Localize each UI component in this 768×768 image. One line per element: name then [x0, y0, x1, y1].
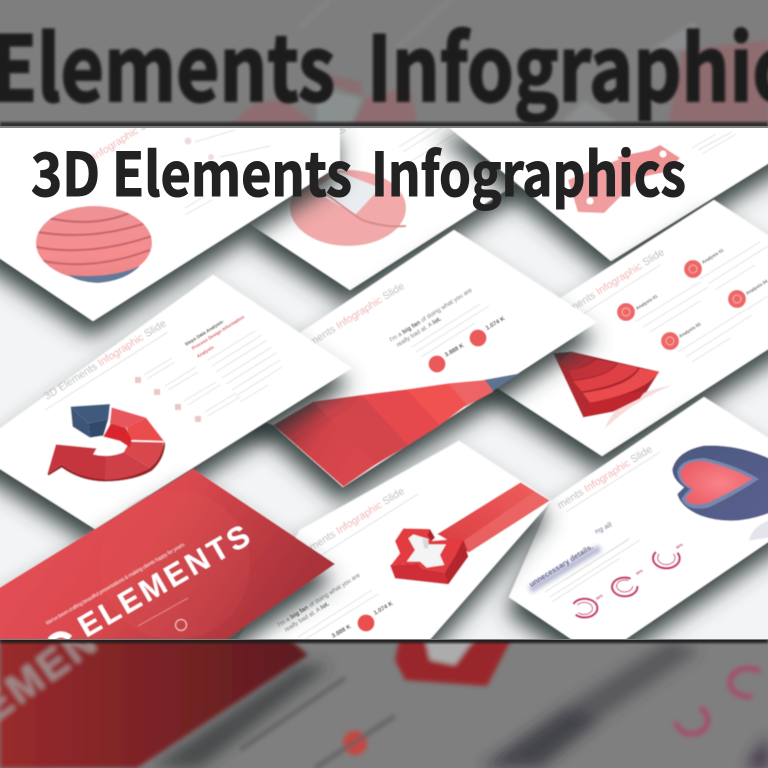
stat: 3.888 K [428, 343, 466, 372]
slide title: ments Infographic Slide [307, 485, 407, 554]
stats [331, 601, 395, 640]
arrow shapes [568, 145, 680, 213]
main collage panel [0, 110, 768, 645]
feature list [135, 358, 240, 422]
main title [31, 127, 686, 214]
donut labels: 86% [675, 542, 684, 550]
slide: red title cover [0, 469, 335, 645]
blurred stat circle [343, 731, 367, 755]
stats: 1.074 K [373, 601, 395, 617]
slide: pie chart: ments Info [317, 112, 365, 149]
intro text: I'm a big fan of doing what you are [276, 572, 362, 629]
bottom blurred band [0, 615, 768, 768]
slide: pie chart [250, 110, 530, 290]
slide title: ments Infographic Slide [555, 443, 655, 512]
analysis items [617, 242, 768, 362]
blurred enlarged title [0, 25, 768, 124]
donut labels: 86% [595, 593, 604, 601]
purple text glow [530, 548, 600, 590]
slide: 3D ring [0, 275, 352, 529]
blurred shadows [150, 640, 768, 768]
analysis items: Analysis 01 [635, 293, 659, 311]
heart chart [672, 445, 768, 541]
slide title: ments Infographic Slide [567, 246, 667, 315]
stat: 1.074 K: 1.074 K [485, 316, 507, 332]
stats: 3.888 K [331, 624, 353, 640]
donut labels [595, 542, 684, 601]
cover subtitle: We've been crafting beautiful presentations & making clients happy for years. [45, 542, 187, 627]
analysis items: Analysis 03 [678, 321, 702, 339]
heading text: ng all [594, 521, 613, 536]
ring chart [47, 404, 165, 482]
stat: 3.888 K: 3.888 K [444, 343, 466, 359]
stair chart [273, 373, 520, 487]
slide: arrows [440, 120, 768, 261]
blurred cross shape [395, 638, 512, 686]
stat: 1.074 K [470, 316, 507, 346]
donut charts [573, 552, 680, 617]
heading text [527, 521, 613, 589]
sphere graphic [36, 206, 152, 284]
bar behind cross [437, 482, 550, 552]
slide: analysis with pyramid [459, 200, 768, 456]
intro text: I'm a big fan of doing what you are [388, 287, 474, 344]
main title: Infographics [371, 127, 686, 214]
intro text: really bad at. A lot. [395, 315, 443, 349]
pyramid chart [553, 352, 673, 428]
cross shape [390, 528, 468, 584]
clock icon [176, 620, 186, 630]
pie shape [290, 170, 406, 246]
slide: heart and donuts [509, 397, 768, 645]
partial 3D numeral [50, 634, 70, 640]
analysis items: Analysis 04 [745, 278, 768, 296]
main title: 3D [31, 127, 100, 214]
process text: Process Design Information [191, 314, 245, 351]
slide: big fan with stair chart [200, 230, 597, 487]
blurred red cover [0, 635, 308, 768]
donut labels: 86% [635, 568, 644, 576]
heading text: unnecessary details. [527, 542, 595, 589]
process text: Analysis [196, 344, 215, 359]
cover heading: ELEMENTS [72, 518, 256, 644]
decorative circle [124, 496, 148, 511]
slide title: ments Infographic Slide [307, 280, 407, 349]
blurred donuts [676, 668, 760, 734]
slide: cross shape [235, 441, 551, 645]
slide: sphere: Infographic Slide [90, 111, 163, 163]
main title: Elements [112, 127, 352, 214]
process text: Steps Data Analysis: [184, 318, 225, 347]
slide title: 3D Elements Infographic Slide [42, 317, 169, 403]
slide: sphere [0, 111, 340, 321]
intro text: really bad at. A lot. [283, 600, 331, 634]
analysis items: Analysis 01 [701, 247, 725, 265]
top blurred band [0, 24, 768, 126]
